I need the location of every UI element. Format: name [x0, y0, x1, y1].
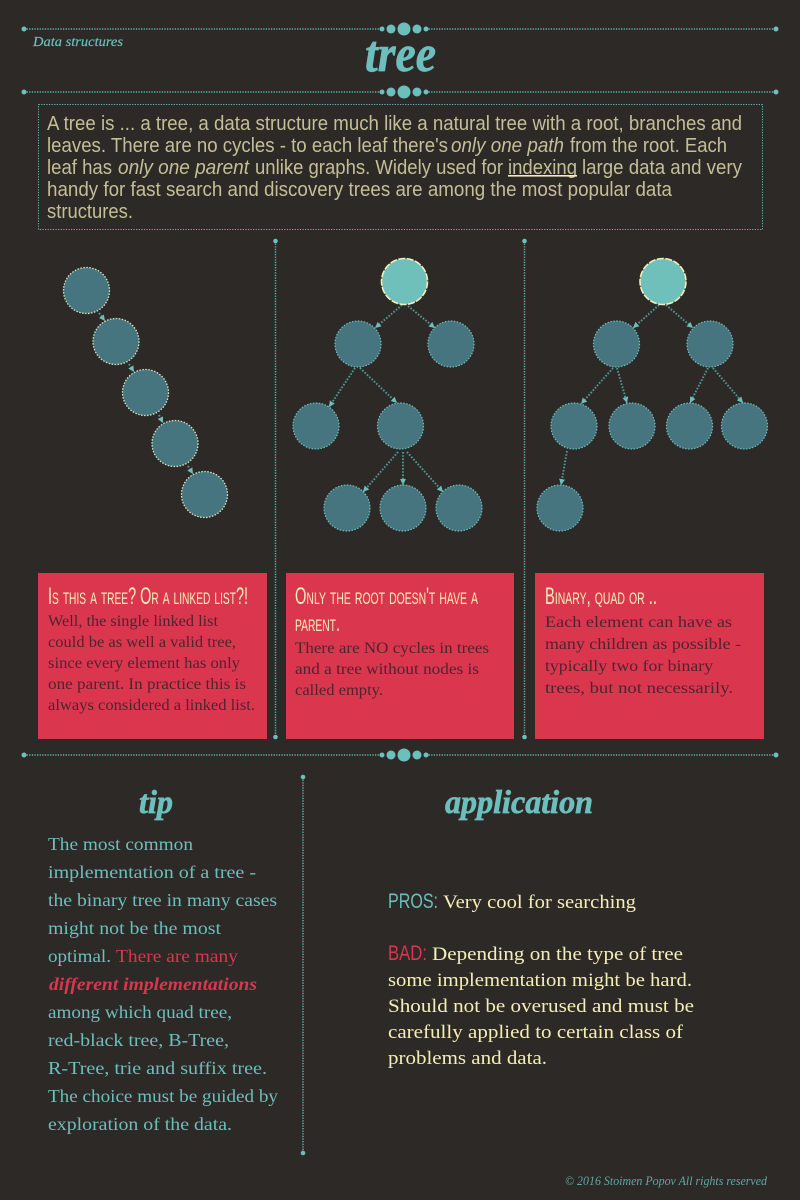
- panel: binary quad callout: [535, 573, 764, 739]
- text block: bad: Depending on the type of tree: [432, 944, 683, 965]
- panel: introduction: [38, 104, 762, 230]
- panel: introduction: leaf has: [47, 157, 112, 179]
- panel: linked list callout: since every element has only: [48, 655, 240, 672]
- middle divider: [22, 748, 778, 762]
- panel: introduction: A tree is ... a tree, a data structure much like a natural tree with a root, branches and: [47, 113, 742, 135]
- panel: root callout: There are NO cycles in trees: [295, 640, 489, 657]
- panel: introduction: from the root. Each: [570, 135, 727, 157]
- text block: tip: There are many: [116, 946, 238, 966]
- panel: linked list callout: could be as well a valid tree,: [48, 634, 236, 651]
- panel: introduction: indexing: [508, 157, 577, 179]
- text block: tip: The choice must be guided by: [48, 1086, 278, 1106]
- text block: tip: optimal.: [48, 946, 111, 966]
- panel: binary quad callout: Binary, quad or ..: [545, 583, 657, 610]
- panel: binary quad callout: trees, but not necessarily.: [545, 680, 733, 697]
- panel: introduction: large data and very: [582, 157, 742, 179]
- text block: tip: R-Tree, trie and suffix tree.: [48, 1058, 267, 1078]
- panel: root callout: parent.: [295, 610, 340, 637]
- panel: introduction: leaves. There are no cycles - to each leaf there's: [47, 135, 448, 157]
- panel: introduction: handy for fast search and discovery trees are among the most popular data: [47, 179, 673, 201]
- panel: linked list callout: Well, the single linked list: [48, 613, 219, 630]
- text block: tip: red-black tree, B-Tree,: [48, 1030, 229, 1050]
- text block: tip: [48, 834, 278, 1134]
- panel: root callout: and a tree without nodes is: [295, 661, 479, 678]
- panel: root callout: [286, 573, 514, 739]
- top divider: [22, 22, 778, 36]
- column divider 1: [273, 239, 278, 739]
- text block: pros: Very cool for searching: [443, 892, 637, 913]
- panel: introduction: unlike graphs. Widely used for: [255, 157, 503, 179]
- diagram: linked list tree: [64, 268, 228, 518]
- panel: binary quad callout: Each element can have as: [545, 614, 732, 631]
- text block: tip: exploration of the data.: [48, 1114, 232, 1134]
- text block: tip: the binary tree in many cases: [48, 890, 277, 910]
- text block: bad: carefully applied to certain class of: [388, 1022, 684, 1043]
- text block: tip: among which quad tree,: [48, 1002, 232, 1022]
- text block: bad: [388, 942, 694, 1069]
- text block: bad: problems and data.: [388, 1048, 547, 1069]
- text block: bad: BAD:: [388, 942, 427, 965]
- bottom column divider: [301, 775, 305, 1155]
- panel: linked list callout: Is this a tree? Or a linked list?!: [48, 583, 248, 610]
- text block: tip: might not be the most: [48, 918, 221, 938]
- title: tree: [365, 26, 436, 83]
- copyright: © 2016 Stoimen Popov All rights reserved: [565, 1174, 768, 1188]
- text block: pros: [388, 890, 637, 913]
- panel: binary quad callout: many children as possible -: [545, 636, 741, 653]
- panel: introduction: only one parent: [118, 157, 250, 179]
- diagram: general tree: [293, 258, 482, 531]
- panel: linked list callout: one parent. In practice this is: [48, 676, 246, 693]
- panel: introduction: only one path: [451, 135, 564, 157]
- text block: tip: implementation of a tree -: [48, 862, 256, 882]
- text block: tip: The most common: [48, 834, 193, 854]
- panel: binary quad callout: typically two for binary: [545, 658, 713, 675]
- panel: introduction: structures.: [47, 201, 133, 223]
- heading: tip: tip: [139, 785, 173, 821]
- text block: tip: different implementations: [49, 974, 257, 994]
- panel: linked list callout: always considered a linked list.: [48, 697, 255, 714]
- header divider: [22, 86, 778, 98]
- panel: linked list callout: [38, 573, 267, 739]
- panel: root callout: Only the root doesn't have a: [295, 583, 478, 610]
- column divider 2: [522, 239, 527, 739]
- panel: root callout: called empty.: [295, 682, 383, 699]
- heading: application: application: [445, 785, 593, 821]
- diagram: binary tree: [537, 258, 768, 531]
- text block: bad: Should not be overused and must be: [388, 996, 694, 1017]
- category label: Data structures: [32, 35, 124, 50]
- text block: bad: some implementation might be hard.: [388, 970, 692, 991]
- text block: pros: PROS:: [388, 890, 438, 913]
